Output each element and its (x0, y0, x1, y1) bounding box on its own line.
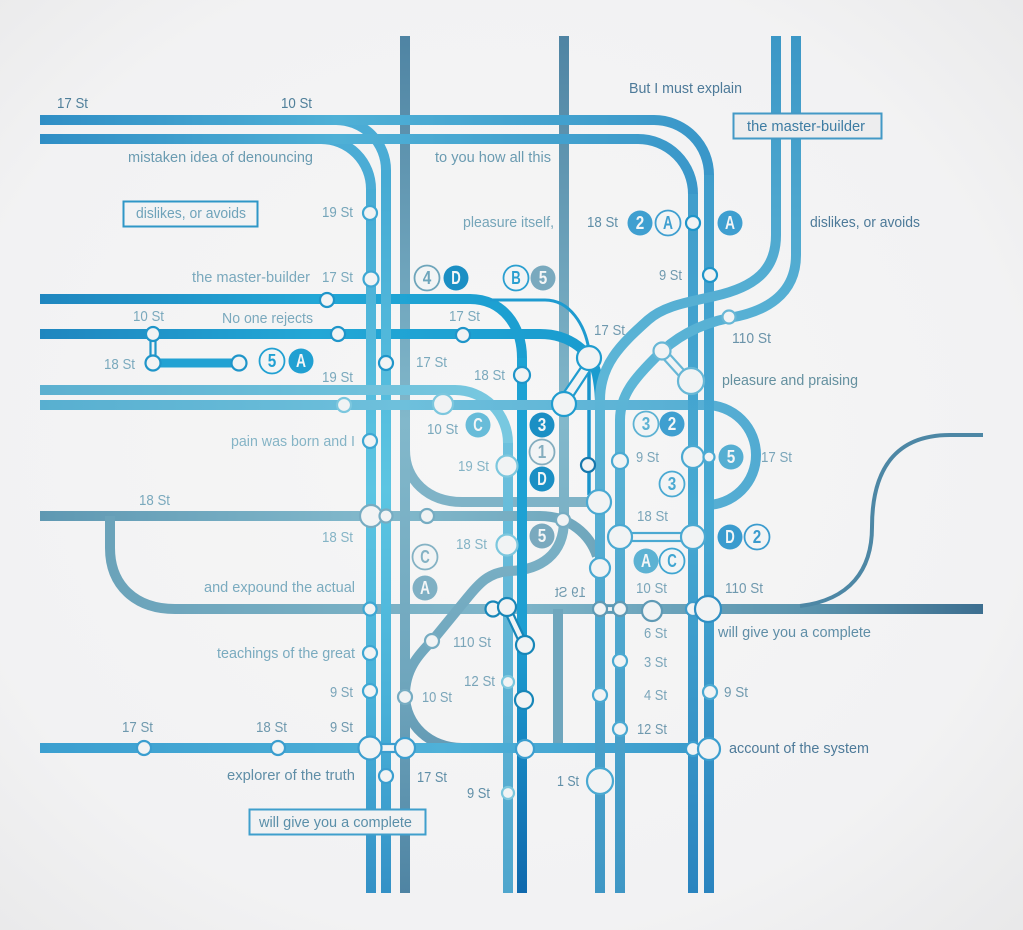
label: 18 St (139, 492, 171, 509)
badge: A outlined (656, 210, 680, 236)
badge: A gray: A (420, 578, 430, 598)
line: blue 299 (40, 299, 522, 358)
stations (137, 206, 736, 799)
label: 9 St (724, 684, 749, 701)
badge: 3: 3 (538, 415, 546, 435)
badges (260, 210, 770, 600)
badge: 4 outlined: 4 (423, 268, 431, 288)
badge: 3 outlined: 3 (668, 474, 676, 494)
label: 10 St (422, 689, 453, 706)
label: 17 St (594, 322, 626, 339)
label: 3 St (644, 654, 668, 671)
label: 9 St (330, 719, 354, 736)
line: top branch arc to 386 (336, 120, 386, 170)
station pair: pleasure and praising (654, 310, 736, 394)
label: 17 St (417, 769, 448, 786)
badge: 3 outlined (634, 412, 658, 436)
label: pleasure itself, (463, 214, 554, 231)
badge: D: D (451, 268, 461, 288)
badge: C gray outlined: C (420, 547, 430, 567)
badge: D (530, 466, 554, 492)
badge: C gray outlined (412, 544, 438, 570)
label: explorer of the truth (227, 767, 355, 784)
label: the master-builder (192, 269, 310, 286)
label: No one rejects (222, 310, 313, 327)
badge: 2 (628, 210, 652, 236)
label: 17 St (416, 354, 448, 371)
badge: C outlined: C (667, 551, 677, 571)
badge: 5: 5 (727, 447, 735, 467)
badge: C light (466, 412, 490, 438)
badge: 5 outlined: 5 (268, 351, 276, 371)
label: 18 St (637, 508, 669, 525)
label: 17 St (57, 95, 89, 112)
badge: A (634, 548, 658, 574)
badge: A outlined: A (663, 213, 673, 233)
badge: 3 outlined: 3 (642, 414, 650, 434)
badge: 2: 2 (636, 213, 644, 233)
callout: the master-builder: the master-builder (747, 118, 865, 135)
badge: 1 outlined: 1 (538, 442, 546, 462)
label: 17 St (449, 308, 481, 325)
line: top 17 St to right (40, 120, 709, 175)
line: bottom 748 (40, 743, 710, 753)
callout: will give you a complete (250, 810, 426, 834)
label: 19 St (322, 369, 354, 386)
badge: 1 outlined (530, 440, 554, 464)
text labels (57, 80, 920, 802)
badge: D: D (725, 527, 735, 547)
label: 9 St (330, 684, 354, 701)
badge: D: D (537, 469, 547, 489)
label: account of the system (729, 740, 869, 757)
label: 12 St (637, 721, 668, 738)
label: 18 St (322, 529, 354, 546)
label: mistaken idea of denouncing (128, 149, 313, 166)
label: pleasure and praising (722, 372, 858, 389)
badge: A: A (641, 551, 651, 571)
label: 10 St (427, 421, 459, 438)
badge: A blue: A (296, 351, 306, 371)
badge: 5 gray (530, 524, 554, 548)
badge: 4 outlined (414, 266, 440, 290)
line: thin curve to upper right (800, 435, 983, 606)
line: blue vertical 522 (517, 358, 527, 893)
badge: 5 gray: 5 (538, 526, 546, 546)
line: gray horizontal 18 St (40, 516, 597, 556)
stations: bottom row (137, 736, 720, 783)
callout: the master-builder (734, 114, 882, 138)
label: pain was born and I (231, 433, 355, 450)
badge: D (718, 524, 742, 550)
line: thin arc from 300 (490, 300, 589, 350)
line: vertical 709 (704, 175, 714, 893)
line: light 405 with right loop (40, 405, 756, 505)
label: will give you a complete (717, 624, 871, 641)
label: 17 St (761, 449, 793, 466)
callout: dislikes, or avoids: dislikes, or avoids (136, 205, 246, 222)
label: mirrored: 19 St (554, 584, 586, 601)
badge: 5 outlined (260, 348, 284, 374)
label: 19 St (458, 458, 490, 475)
badge: B outlined (504, 266, 528, 290)
label: teachings of the great (217, 645, 356, 662)
badge: C light: C (473, 415, 483, 435)
badge: 2 (660, 412, 684, 436)
badge: A blue (288, 348, 314, 374)
label: 110 St (732, 330, 772, 347)
stations: gray (360, 505, 570, 704)
line: blue stub 18 St (153, 358, 239, 368)
label: 19 St (322, 204, 354, 221)
badge: 2: 2 (668, 414, 676, 434)
label: 18 St (474, 367, 506, 384)
label: 12 St (464, 673, 496, 690)
line: thin vertical under 17 St (587, 358, 591, 495)
badge: D (444, 266, 468, 290)
station cluster: 110 St (486, 598, 534, 709)
label: 6 St (644, 625, 668, 642)
label: 110 St (453, 634, 492, 651)
line: light vertical 508 (503, 443, 513, 893)
callout: dislikes, or avoids (124, 202, 258, 226)
badge: 3 outlined (660, 472, 684, 496)
line: vertical 371 (366, 189, 376, 893)
stations: 609 row (593, 596, 721, 622)
label: 18 St (104, 356, 136, 373)
line: light 390 (40, 390, 508, 443)
badge: C outlined (660, 548, 684, 574)
line: gray short vertical (553, 609, 563, 748)
stations: light level (337, 394, 518, 799)
badge: 5 gray: 5 (539, 268, 547, 288)
badge: B outlined: B (511, 268, 521, 288)
label: 10 St (133, 308, 165, 325)
badge: 5 gray (530, 266, 556, 290)
line: right top 776 into 600 (600, 36, 776, 893)
line: right top 796 into 620 (620, 36, 796, 893)
badge: 3 (530, 412, 554, 438)
line: blue 334 (40, 334, 600, 405)
line: second branch arc to 371 (321, 139, 371, 189)
label: 110 St (725, 580, 764, 597)
stations: line 371 (363, 206, 378, 698)
label: 18 St (587, 214, 619, 231)
line: vertical 693 (688, 194, 698, 893)
badge: 5 (718, 444, 744, 470)
label: 18 St (456, 536, 488, 553)
label: 9 St (467, 785, 491, 802)
label: dislikes, or avoids (810, 214, 920, 231)
line: second top to right (40, 139, 693, 194)
label: to you how all this (435, 149, 551, 166)
line: gray vertical 405 (400, 36, 410, 893)
line: gray vertical 564 with S curve (405, 36, 564, 748)
badge: 2 outlined: 2 (753, 527, 761, 547)
label: 4 St (644, 687, 668, 704)
label: 9 St (636, 449, 660, 466)
line: gray loop to 609 level (110, 516, 983, 609)
line: vertical 386 (381, 170, 391, 893)
label: But I must explain (629, 80, 742, 97)
badge: 2 outlined (744, 524, 770, 550)
label: 9 St (659, 267, 683, 284)
label: and expound the actual (204, 579, 355, 596)
callout: will give you a complete: will give you a complete (258, 814, 412, 831)
label: 17 St (122, 719, 154, 736)
stations: central (587, 446, 717, 794)
label: 17 St (322, 269, 354, 286)
badge: A (718, 210, 742, 236)
line: gray inner loop (405, 450, 598, 502)
stations: upper blue (146, 216, 717, 383)
label: 1 St (557, 773, 580, 790)
label: 10 St (636, 580, 668, 597)
badge: A: A (725, 213, 735, 233)
label: 18 St (256, 719, 288, 736)
label: 10 St (281, 95, 313, 112)
station pair: 17 St interchange (552, 346, 601, 416)
station: dark node on thin line (581, 458, 595, 472)
badge: A gray (412, 576, 438, 600)
